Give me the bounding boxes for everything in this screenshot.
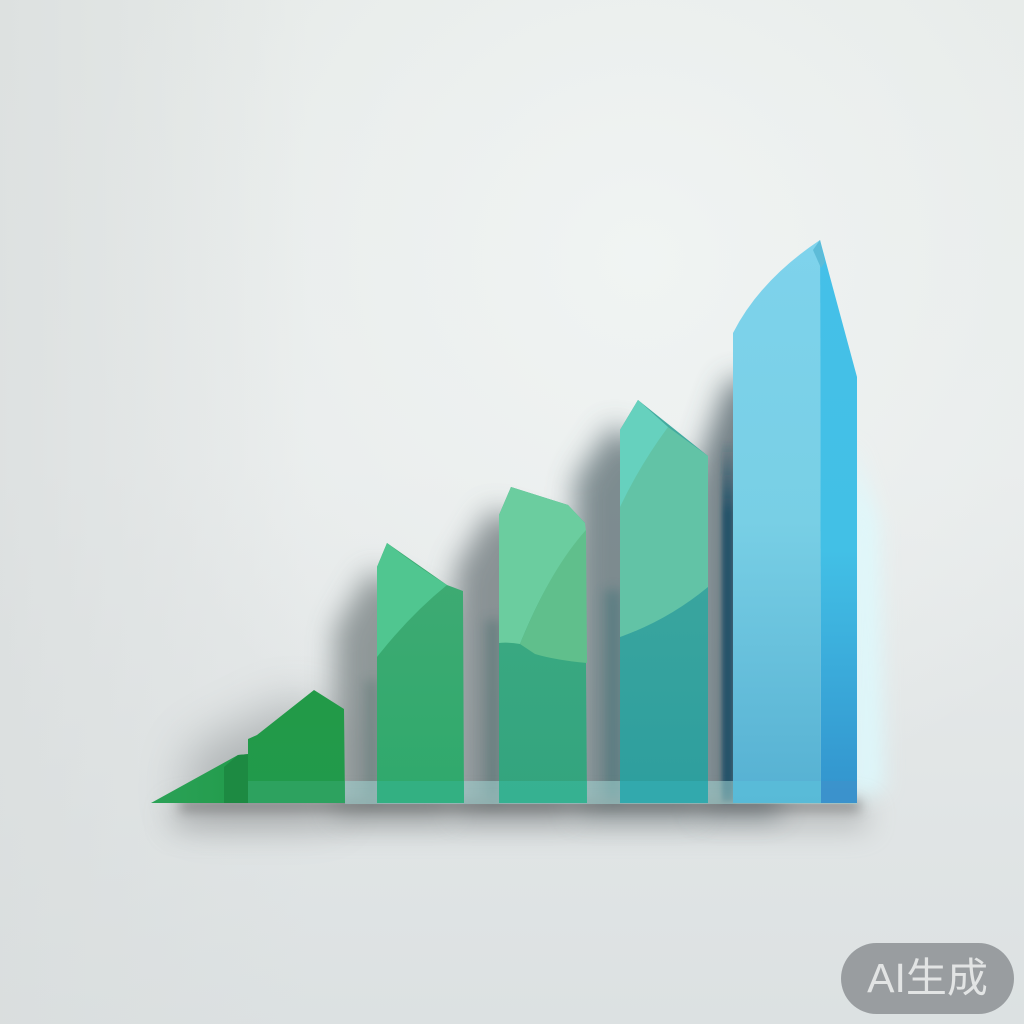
bar 5: teal bar xyxy=(620,400,708,803)
bar 1: small green triangle wedge xyxy=(151,754,249,803)
base band: translucent shelf xyxy=(345,781,857,804)
glow: cyan light right of tallest bar xyxy=(850,440,884,800)
bar 6: tall blue bar xyxy=(733,240,857,803)
bar 2: dark green short bar xyxy=(248,690,345,803)
bar 3: green bar xyxy=(377,543,464,803)
bar 4: mint bar xyxy=(499,487,587,803)
badge: AI generated label xyxy=(841,943,1014,1014)
cast shadows behind the bars xyxy=(172,380,867,828)
badge: AI generated label: AI生成 xyxy=(867,955,988,1001)
